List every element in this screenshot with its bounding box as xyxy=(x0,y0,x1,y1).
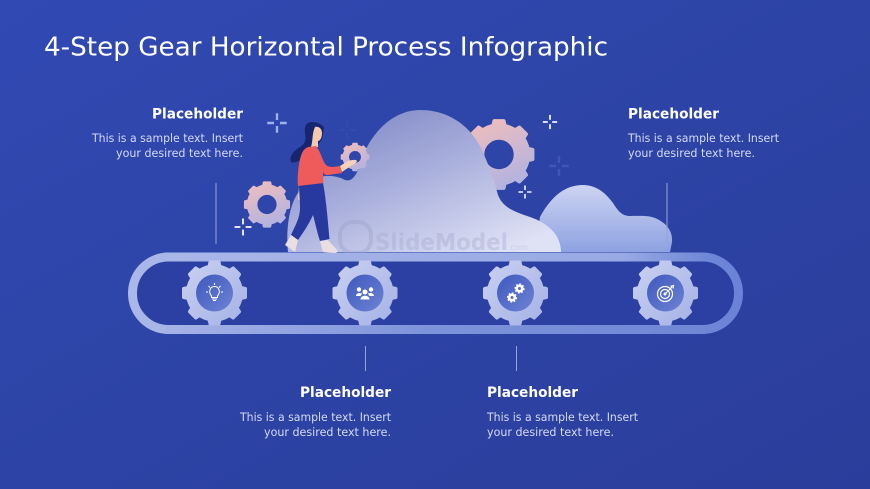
text block: bottom left: your desired text here. xyxy=(264,425,391,439)
text block: bottom right: This is a sample text. Insert xyxy=(486,410,638,424)
text block: bottom right: your desired text here. xyxy=(487,425,614,439)
watermark xyxy=(340,222,528,256)
title: 4-Step Gear Horizontal Process Infographic xyxy=(44,32,608,62)
gear step 4: target xyxy=(634,262,696,324)
icon: large pink gear behind cloud xyxy=(465,121,533,188)
figure: woman with gear xyxy=(285,122,369,253)
text block: top left: Placeholder xyxy=(152,106,243,122)
icon: light bulb xyxy=(206,283,223,300)
connector lines xyxy=(216,183,667,371)
text block: top right: your desired text here. xyxy=(628,146,755,160)
hair xyxy=(290,122,324,162)
watermark: SlideModel xyxy=(375,230,508,256)
front hand xyxy=(340,160,357,172)
shoes xyxy=(285,235,338,253)
text block: bottom left xyxy=(239,385,391,439)
small cloud xyxy=(535,185,672,252)
text block: top right: This is a sample text. Insert xyxy=(627,131,779,145)
text block: top left xyxy=(91,106,243,160)
face xyxy=(311,127,322,147)
text block: bottom left: Placeholder xyxy=(300,385,391,401)
back arm hand xyxy=(298,186,303,200)
icon: target xyxy=(658,286,674,302)
text block: top left: This is a sample text. Insert xyxy=(91,131,243,145)
legs xyxy=(291,183,330,241)
conveyor belt xyxy=(132,252,738,334)
icon: team xyxy=(356,287,374,300)
text block: bottom left: This is a sample text. Insert xyxy=(239,410,391,424)
icon: left pink gear xyxy=(245,182,289,227)
gear step 3: settings xyxy=(484,262,546,324)
text block: top right: Placeholder xyxy=(628,106,719,122)
icon: sparkles xyxy=(235,113,569,235)
gear step 1: idea xyxy=(184,262,246,324)
text block: bottom right: Placeholder xyxy=(487,385,578,401)
icon: small gear in hand xyxy=(341,143,369,171)
gear step 2: team xyxy=(334,262,396,324)
icon: two gears xyxy=(508,284,524,302)
text block: top right xyxy=(627,106,779,160)
text block: bottom right xyxy=(486,385,638,439)
large cloud xyxy=(287,110,561,252)
shirt xyxy=(298,146,342,186)
watermark: .com xyxy=(508,243,528,252)
text block: top left: your desired text here. xyxy=(116,146,243,160)
